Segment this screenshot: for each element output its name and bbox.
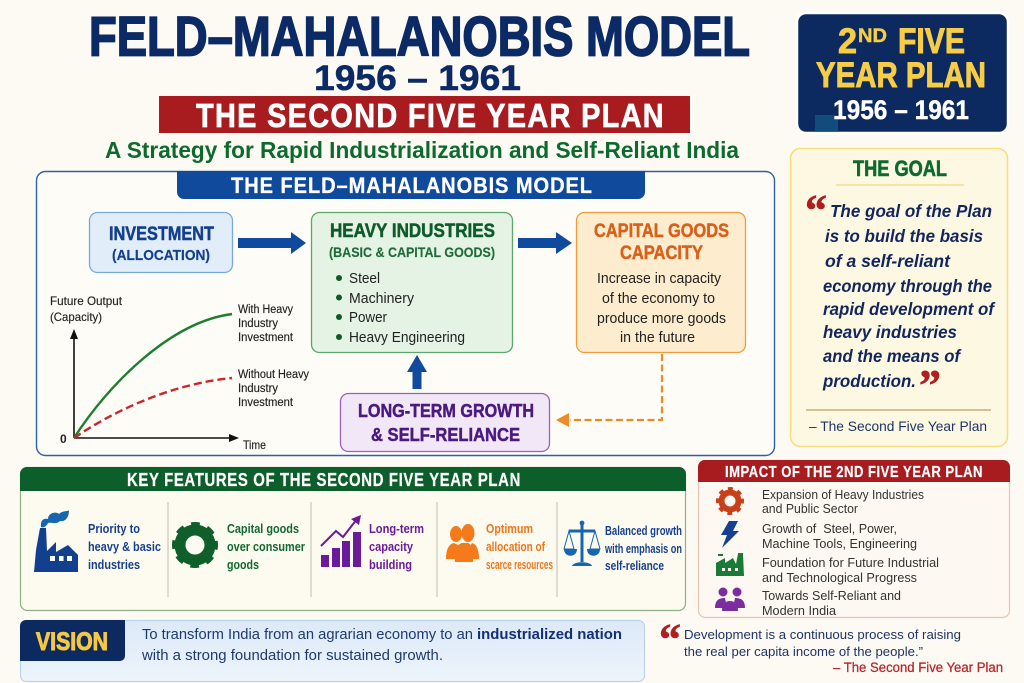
box: long-term growth: & SELF-RELIANCE <box>371 424 520 445</box>
quote marks: “ <box>805 186 827 235</box>
impact row: expansion: Expansion of Heavy Industries <box>762 488 924 502</box>
impact row: foundation: Foundation for Future Industrial <box>762 556 939 570</box>
box: capital goods capacity: Increase in capacity <box>597 271 722 287</box>
feature: balanced growth <box>564 521 682 573</box>
impact row: self-reliant <box>715 588 901 618</box>
goal quote text: of a self-reliant <box>825 251 951 271</box>
feature text: allocation of <box>486 539 546 554</box>
feature text: building <box>369 557 412 572</box>
goal quote text: production. <box>822 371 916 391</box>
icon: people <box>446 524 479 562</box>
feature text <box>369 521 424 572</box>
impact row: growth: Machine Tools, Engineering <box>762 537 917 551</box>
goal quote text <box>822 201 996 391</box>
diagram heading: THE FELD–MAHALANOBIS MODEL <box>231 173 593 198</box>
line chart: future output over time: Industry <box>238 383 278 395</box>
panel: the model diagram <box>36 171 774 456</box>
icon: purple people <box>715 588 745 611</box>
impact row: foundation <box>716 553 939 585</box>
feature text: Optimum <box>486 521 533 536</box>
impact row: growth <box>721 521 917 551</box>
goal quote text: rapid development of <box>823 299 996 319</box>
line chart: future output over time: (Capacity) <box>50 310 102 324</box>
arrow: heavy industries to capital goods <box>518 232 572 254</box>
feature text: Priority to <box>88 521 140 536</box>
closing quote <box>659 615 1003 675</box>
badge: 2nd five year plan: 2 <box>838 22 857 61</box>
icon: gear <box>172 522 218 568</box>
panel: vision <box>20 620 644 682</box>
box: long-term growth: LONG-TERM GROWTH <box>358 400 534 421</box>
goal quote text: is to build the basis <box>825 226 983 246</box>
goal quote text: heavy industries <box>823 322 957 342</box>
impact row: expansion <box>716 487 924 516</box>
badge: 2nd five year plan: YEAR PLAN <box>816 56 986 95</box>
line chart: future output over time: With Heavy <box>238 304 293 316</box>
box: investment: INVESTMENT <box>109 224 214 245</box>
icon: factory <box>34 510 78 572</box>
arrow: investment to heavy industries <box>238 232 306 254</box>
panel: the goal <box>790 148 1008 446</box>
impact row: expansion: and Public Sector <box>762 502 858 516</box>
vision text: To transform India from an agrarian economy to an <box>142 627 473 643</box>
feature text: over consumer <box>227 539 305 554</box>
box: heavy industries: (BASIC & CAPITAL GOODS) <box>329 244 495 260</box>
feature: priority to heavy industries <box>34 510 161 572</box>
line chart: future output over time: Future Output <box>50 294 123 308</box>
tagline: A Strategy for Rapid Industrialization and Self-Reliant India <box>105 137 739 163</box>
badge: 2nd five year plan: 1956 – 1961 <box>833 95 969 125</box>
feature: long-term capacity <box>321 515 424 572</box>
box: capital goods capacity: CAPACITY <box>620 243 703 264</box>
feature text: goods <box>227 557 259 572</box>
box: heavy industries: Power <box>349 310 387 326</box>
icon: green factory <box>716 553 744 576</box>
box: investment <box>90 212 232 272</box>
box: heavy industries: HEAVY INDUSTRIES <box>330 221 495 242</box>
feature text: scarce resources <box>486 557 553 572</box>
closing quote: “ <box>659 615 681 664</box>
closing quote: the real per capita income of the people.” <box>684 644 923 659</box>
box: capital goods capacity: in the future <box>620 330 695 346</box>
feature text: self-reliance <box>605 558 664 573</box>
goal attribution: – The Second Five Year Plan <box>809 418 987 434</box>
feature: optimum allocation <box>446 521 553 572</box>
quote marks <box>805 186 941 410</box>
vision text <box>141 627 622 664</box>
line chart: future output over time: Investment <box>238 332 294 344</box>
box: capital goods capacity: of the economy to <box>602 291 715 307</box>
title years: 1956 – 1961 <box>314 59 521 98</box>
feature text: Long-term <box>369 521 424 536</box>
line chart: future output over time: Investment <box>238 397 294 409</box>
line chart: future output over time: 0 <box>60 432 67 446</box>
feature: capital goods <box>172 521 305 572</box>
panel: key features <box>20 467 686 610</box>
icon: gear <box>716 487 744 515</box>
feature text <box>227 521 305 572</box>
vision text: with a strong foundation for sustained growth. <box>141 648 443 664</box>
icon: scales <box>564 521 600 566</box>
goal heading: THE GOAL <box>853 156 947 181</box>
box: heavy industries: Heavy Engineering <box>349 330 465 346</box>
impact row: self-reliant: Modern India <box>762 604 836 618</box>
box: heavy industries <box>312 212 512 352</box>
box: capital goods capacity <box>576 212 746 352</box>
feature text: Capital goods <box>227 521 299 536</box>
box: capital goods capacity: produce more goods <box>597 311 726 327</box>
line chart: future output over time: Time <box>243 438 266 452</box>
feature text: heavy & basic <box>88 539 161 554</box>
goal quote text: economy through the <box>823 276 992 296</box>
feature text: capacity <box>369 539 414 554</box>
vision label <box>20 620 125 661</box>
impact row: growth: Growth of Steel, Power, <box>762 522 897 536</box>
quote marks: ” <box>919 361 941 410</box>
badge: 2nd five year plan: ND <box>858 26 887 47</box>
arrow: growth up to heavy industries <box>407 355 427 389</box>
box: investment: (ALLOCATION) <box>112 247 210 264</box>
feature text <box>486 521 553 572</box>
icon: rising bar chart <box>321 515 361 567</box>
key features heading: KEY FEATURES OF THE SECOND FIVE YEAR PLAN <box>127 469 521 490</box>
panel: impact <box>698 460 1010 618</box>
icon: lightning bolt <box>721 521 739 548</box>
feature text: industries <box>88 557 140 572</box>
badge: 2nd five year plan <box>797 13 1008 133</box>
impact heading <box>698 460 1010 482</box>
line chart: future output over time: Industry <box>238 318 278 330</box>
box: heavy industries: Steel <box>349 271 380 287</box>
title: FELD–MAHALANOBIS MODEL <box>89 4 750 68</box>
vision label: VISION <box>36 628 108 656</box>
subtitle banner: THE SECOND FIVE YEAR PLAN <box>196 97 665 134</box>
line chart: future output over time: Without Heavy <box>238 369 309 381</box>
goal quote text: and the means of <box>823 346 962 366</box>
feature text <box>88 521 161 572</box>
line chart: future output over time <box>50 294 309 452</box>
feature text: with emphasis on <box>604 541 682 556</box>
key features heading <box>20 467 686 491</box>
goal quote text: The goal of the Plan <box>830 201 992 221</box>
feature text <box>604 523 682 573</box>
badge: 2nd five year plan: FIVE <box>898 22 965 61</box>
arrow: dashed feedback <box>556 354 662 427</box>
vision text: industrialized nation <box>477 627 622 643</box>
box: capital goods capacity: CAPITAL GOODS <box>594 221 729 242</box>
box: long-term growth <box>340 394 550 452</box>
closing quote: Development is a continuous process of raising <box>684 627 961 642</box>
box: heavy industries: Machinery <box>349 291 415 307</box>
closing quote: – The Second Five Year Plan <box>833 660 1003 675</box>
impact row: self-reliant: Towards Self-Reliant and <box>762 589 901 603</box>
impact row: foundation: and Technological Progress <box>762 571 917 585</box>
feature text: Balanced growth <box>605 523 682 538</box>
